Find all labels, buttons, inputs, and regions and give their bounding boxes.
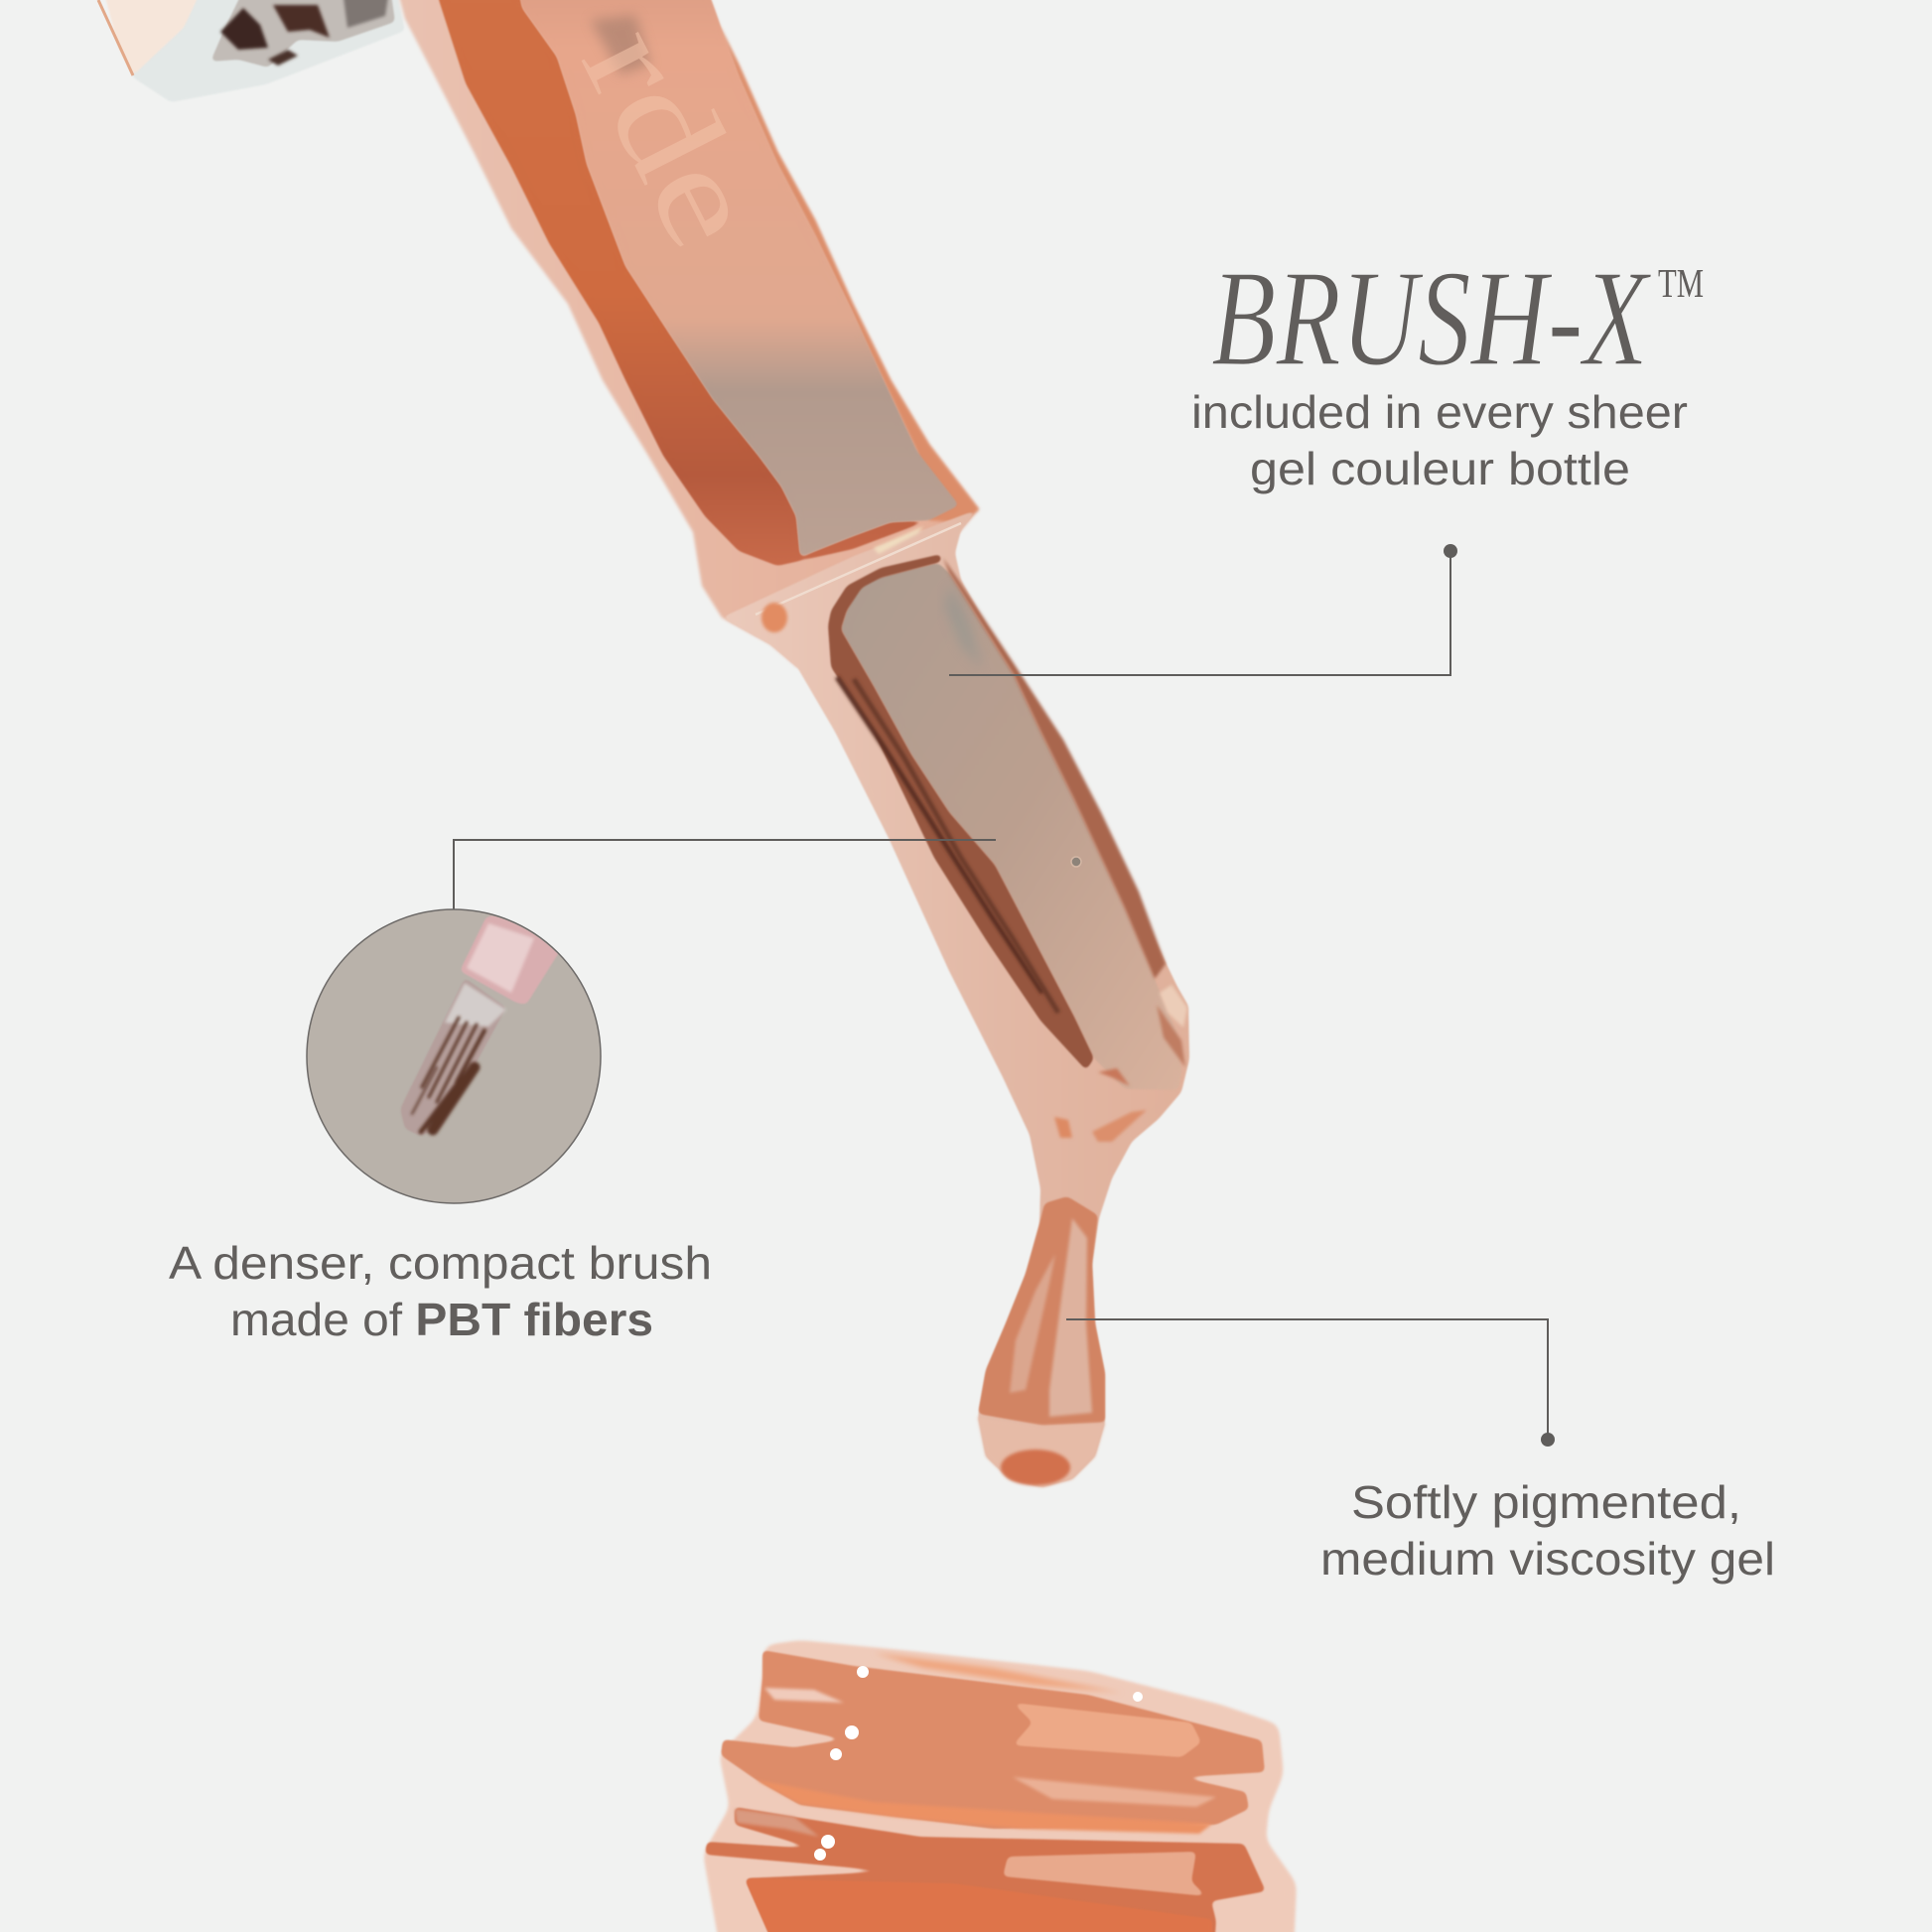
right rim [685, 0, 979, 523]
tip brown fleck [1157, 1005, 1185, 1067]
text: included in every sheer gel couleur bottle [1191, 386, 1688, 494]
collar seam [756, 523, 961, 615]
collar reflection [874, 526, 923, 554]
brush and drop outer gel shape [722, 509, 1189, 1487]
orange gel strip [431, 0, 929, 566]
gel drop [978, 1196, 1105, 1487]
right dark rim [943, 558, 1166, 979]
orange droplet on collar [761, 603, 787, 632]
pale pink to taupe body [512, 0, 959, 557]
text: softly pigmented gel: Softly pigmented, [1351, 1476, 1741, 1528]
crescent fleck [1098, 1068, 1130, 1086]
lower gel mass [705, 1807, 1266, 1932]
pale highlight one [1013, 1703, 1201, 1757]
text: softly pigmented gel: medium viscosity gel [1320, 1533, 1775, 1585]
orange pool inside the drop [1001, 1449, 1070, 1485]
neck outline [703, 1640, 1297, 1932]
bottle neck with gel [703, 1640, 1297, 1932]
pale highlight three [1003, 1852, 1206, 1896]
brush handle [389, 0, 979, 667]
moulded logo on handle: rde [552, 2, 791, 271]
inset brush stem [400, 978, 506, 1136]
leader line: brush-x callout [949, 544, 1457, 675]
wide fleck [1092, 1110, 1147, 1142]
lower drop belly [978, 1417, 1105, 1487]
ferrule collar details [756, 523, 961, 632]
leader line: fibers callout [454, 840, 996, 909]
brush bristles coated in gel [722, 509, 1189, 1487]
rim facet on top [874, 1653, 1122, 1693]
bright orange band [757, 1780, 1212, 1834]
circular brush inset [307, 909, 601, 1203]
dot fleck [1054, 1117, 1072, 1138]
pale left streak [764, 1688, 844, 1703]
drop right facet [1049, 1218, 1092, 1417]
drop neck orange body [978, 1196, 1105, 1426]
bottom orange band [745, 1878, 1212, 1932]
grey-blue reflection [945, 586, 983, 670]
dark brown streak [828, 554, 1094, 1070]
text: denser compact brush: A denser, compact brush [169, 1237, 712, 1289]
handle outer gel [389, 0, 979, 667]
small air bubble [1071, 857, 1081, 867]
frayed tip with gel [1160, 985, 1187, 1028]
inset ferrule [461, 915, 558, 1005]
text: softly pigmented gel [1320, 1476, 1775, 1585]
heading: BRUSH-X trademark: TM [1658, 260, 1704, 306]
upper gel mass [721, 1650, 1265, 1829]
second dark bristle line [854, 679, 1058, 1013]
dark mottling near the collar [591, 15, 650, 74]
text: included in every sheer gel couleur bottle: included in every sheer [1191, 386, 1688, 438]
text: denser compact brush: made of PBT fibers [230, 1294, 653, 1345]
taupe bristle body [841, 563, 1181, 1090]
heading: BRUSH-X trademark: BRUSH-X [1211, 242, 1652, 395]
dark bristle lines [837, 677, 1042, 993]
applicator cap [98, 0, 405, 102]
pale highlight two [1013, 1777, 1216, 1807]
pale left lower facets [735, 1809, 819, 1837]
text: denser compact brush [169, 1237, 712, 1345]
leader line: gel callout [1066, 1319, 1555, 1447]
drop left facet [1010, 1254, 1055, 1393]
inset bristles [412, 1018, 484, 1132]
text: included in every sheer gel couleur bottle: gel couleur bottle [1250, 443, 1630, 494]
sparkles [814, 1666, 1143, 1861]
